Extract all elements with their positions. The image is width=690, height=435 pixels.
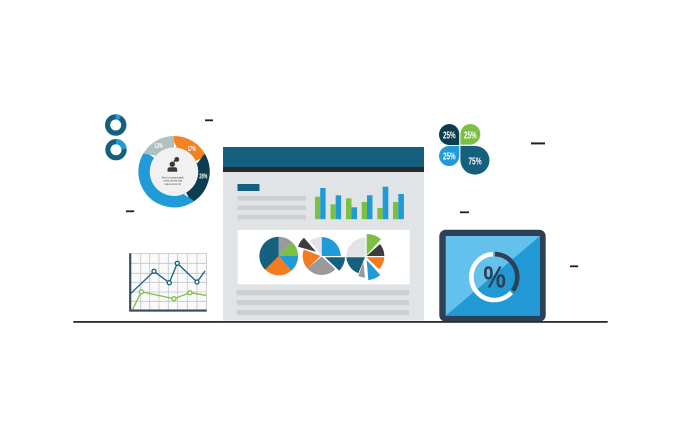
tablet with percent gauge — [439, 230, 546, 322]
icon: person with speech bubbles — [168, 157, 179, 172]
green data series — [133, 290, 206, 309]
quadrant percentage chart — [439, 124, 490, 175]
document header band — [223, 147, 424, 172]
quadrant labels: 25% — [464, 131, 477, 142]
pie chart 1 — [259, 237, 298, 275]
donut percentage labels: 28% — [199, 174, 208, 180]
pie chart 3 — [346, 234, 384, 280]
ground line — [73, 321, 608, 323]
percent symbol: % — [483, 260, 506, 294]
bar chart — [315, 187, 404, 219]
donut centre caption — [162, 175, 184, 186]
document heading tag — [238, 184, 260, 191]
donut centre caption: natus error sit — [164, 182, 181, 186]
text lines: upper left — [238, 196, 306, 220]
line chart — [130, 253, 207, 311]
text lines: lower — [237, 290, 409, 315]
quadrant labels — [443, 131, 482, 167]
progress ring — [462, 244, 527, 310]
donut centre caption: unde omnis iste — [163, 179, 183, 183]
donut percentage labels — [154, 143, 208, 180]
quadrant labels: 25% — [443, 152, 456, 163]
quadrant labels: 25% — [443, 131, 456, 142]
donut centre caption: Sed ut perspiciatis — [162, 175, 184, 179]
pie chart 2 — [298, 237, 345, 275]
small dash marks — [126, 119, 578, 267]
icon: ring gauge bottom — [108, 142, 124, 158]
donut chart — [132, 130, 216, 213]
icon: ring gauge top — [108, 117, 124, 133]
panel: pie charts — [238, 230, 410, 284]
panel: report document — [223, 147, 424, 320]
chart axes — [130, 253, 207, 311]
donut percentage labels: 13% — [154, 143, 163, 150]
quadrant labels: 75% — [468, 156, 482, 167]
blue data series — [131, 261, 205, 293]
donut percentage labels: 17% — [188, 146, 196, 153]
chart grid — [130, 253, 207, 310]
